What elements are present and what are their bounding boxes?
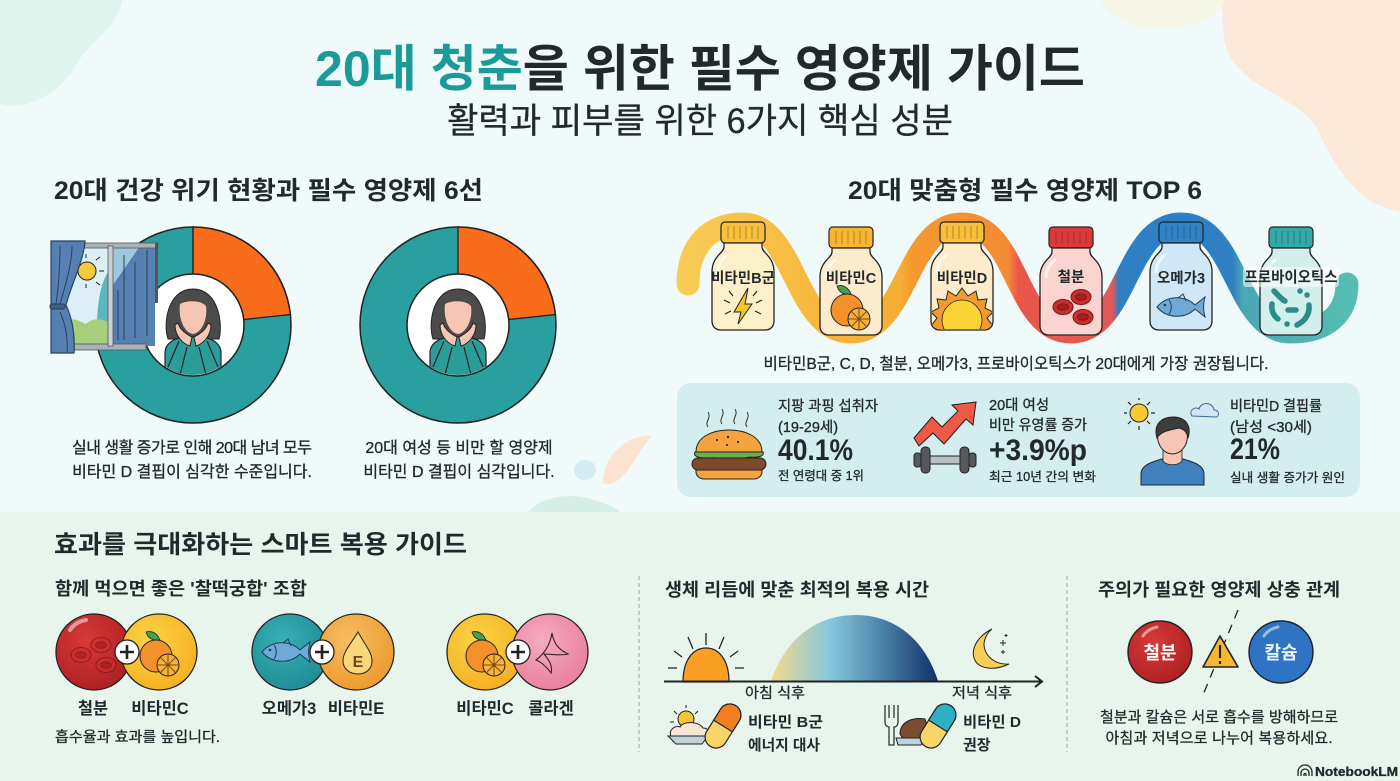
text: morning vitamin: 비타민 B군: [748, 714, 823, 731]
label: 비타민D: [937, 270, 987, 287]
label: 비타민B군: [711, 270, 775, 287]
calcium ball: 칼슘: [1264, 643, 1298, 663]
icon: probiotics: [1272, 291, 1309, 325]
combo label: iron: 철분: [78, 699, 108, 718]
stat: vitamin D deficiency: (남성 <30세): [1230, 419, 1312, 436]
label: evening: 저녁 식후: [952, 685, 1012, 702]
subheading: conflicts: 주의가 필요한 영양제 상충 관계: [1098, 580, 1340, 600]
combo: vitamin C + collagen: [447, 614, 588, 690]
stat: fat intake: 전 연령대 중 1위: [778, 469, 864, 483]
donut chart 1 with window: [50, 227, 291, 423]
icon: rising arrow and dumbbell: [914, 402, 976, 473]
stat: obesity increase: +3.9%p: [989, 434, 1087, 467]
label: 비타민C: [826, 270, 877, 287]
conflict diagram: [1128, 610, 1313, 695]
timeline chart: [664, 615, 1042, 754]
stat: obesity increase: 20대 여성: [989, 397, 1049, 414]
bottle: 오메가3: [1150, 222, 1212, 330]
heading: right section: 20대 맞춤형 필수 영양제 TOP 6: [848, 177, 1202, 205]
title: 20대 청춘을 위한 필수 영양제 가이드: [315, 41, 1085, 97]
calcium ball: [1249, 621, 1313, 683]
stat: vitamin D deficiency: [1230, 398, 1345, 485]
warning triangle: [1203, 636, 1238, 667]
donut caption 2: 비타민 D 결핍이 심각입니다.: [363, 463, 555, 481]
decorative blob: peach: [603, 436, 652, 484]
stat: fat intake: 40.1%: [778, 434, 853, 467]
icon: lightning bolt: [734, 288, 752, 324]
label: 오메가3: [1157, 270, 1205, 287]
decorative blob: mint: [528, 496, 620, 512]
icon: orange: [831, 286, 870, 330]
bottle: 비타민D: [931, 222, 993, 340]
iron ball: [1128, 621, 1192, 683]
subheading: combinations: 함께 먹으면 좋은 '찰떡궁합' 조합: [55, 579, 307, 599]
sunrise: [668, 633, 744, 682]
daylight arc: [771, 615, 938, 681]
subtitle: 활력과 피부를 위한 6가지 핵심 성분: [447, 102, 953, 141]
stat: fat intake: 지팡 과핑 섭취자: [778, 398, 878, 415]
label: 철분: [1058, 269, 1084, 286]
wave ribbon: [688, 224, 1347, 332]
combo label: vitamin E: 비타민E: [328, 699, 384, 718]
heading: dosing guide: 효과를 극대화하는 스마트 복용 가이드: [54, 531, 467, 559]
text: evening vitamin: [963, 714, 1021, 754]
decorative blob: top right: [1222, 0, 1400, 212]
icon: sun: [932, 287, 992, 329]
bottle: 철분: [1040, 227, 1102, 335]
stat: vitamin D deficiency: 비타민D 결핍률: [1230, 398, 1322, 415]
decorative blob: blue: [574, 460, 596, 480]
stat: vitamin D deficiency: 실내 생활 증가가 원인: [1230, 471, 1345, 485]
donut chart 2: [360, 227, 556, 423]
stat: vitamin D deficiency: 21%: [1230, 433, 1280, 466]
bottle: 프로바이오틱스: [1243, 227, 1339, 335]
panel: statistics card: [677, 383, 1360, 497]
text: evening vitamin: 권장: [963, 737, 991, 754]
text: morning vitamin: 에너지 대사: [748, 737, 820, 754]
text: evening vitamin: 비타민 D: [963, 714, 1021, 731]
subheading: timing: 생체 리듬에 맞춘 최적의 복용 시간: [665, 580, 929, 600]
label: 프로바이오틱스: [1244, 269, 1338, 286]
panel: smart dosing guide: [0, 512, 1400, 781]
combo label: omega-3: 오메가3: [262, 699, 316, 718]
combo label: vitamin C: 비타민C: [456, 699, 514, 718]
combo caption: 흡수율과 효과를 높입니다.: [55, 729, 220, 746]
halo behind label: [1243, 267, 1339, 287]
stat: obesity increase: 최근 10년 간의 변화: [989, 470, 1097, 484]
donut caption 1: 비타민 D 결핍이 심각한 수준입니다.: [72, 463, 312, 481]
icon: burger: [692, 409, 766, 479]
stat: fat intake: [778, 398, 878, 483]
stat: obesity increase: 비만 유영률 증가: [989, 417, 1087, 434]
conflict caption: 철분과 칼슘은 서로 흡수를 방해하므로: [1100, 709, 1338, 726]
combo: iron + vitamin C: [56, 614, 197, 690]
icon: red blood cells: [1053, 290, 1093, 324]
combo label: vitamin C: 비타민C: [131, 699, 189, 718]
icon: fork meal and capsule evening: [885, 700, 960, 752]
icon: fish: [1157, 294, 1205, 317]
conflict caption: 아침과 저녁으로 나누어 복용하세요.: [1106, 730, 1332, 747]
decorative blob: top left: [0, 0, 122, 106]
stat: obesity increase: [989, 397, 1097, 484]
text: morning vitamin: [748, 714, 823, 754]
icon: person with sun and cloud: [1124, 398, 1218, 485]
label: morning: 아침 식후: [745, 685, 805, 702]
combo label: collagen: 콜라겐: [528, 699, 574, 718]
donut caption 2: 20대 여성 등 비만 할 영양제: [365, 439, 553, 457]
stat: fat intake: (19-29세): [778, 419, 838, 436]
combo: omega-3 + vitamin E: E: [353, 654, 364, 671]
timeline axis arrow: [664, 676, 1042, 687]
heading: left section: 20대 건강 위기 현황과 필수 영양제 6선: [54, 177, 483, 205]
watermark: NotebookLM: [1315, 765, 1398, 779]
icon: window with curtains: [50, 241, 158, 353]
donut caption 1: 실내 생활 증가로 인해 20대 남녀 모두: [72, 439, 312, 457]
decorative blob: top centre-right: [1100, 0, 1225, 28]
bottle: 비타민B군: [711, 222, 775, 330]
moon and stars: [973, 629, 1009, 668]
icon: meal and capsule morning: [668, 700, 745, 752]
combo: omega-3 + vitamin E: [252, 614, 394, 690]
iron ball: 철분: [1143, 643, 1177, 663]
bottle summary: 비타민B군, C, D, 철분, 오메가3, 프로바이오틱스가 20대에게 가장 권장됩니다.: [764, 355, 1268, 373]
bottle: 비타민C: [820, 227, 882, 335]
